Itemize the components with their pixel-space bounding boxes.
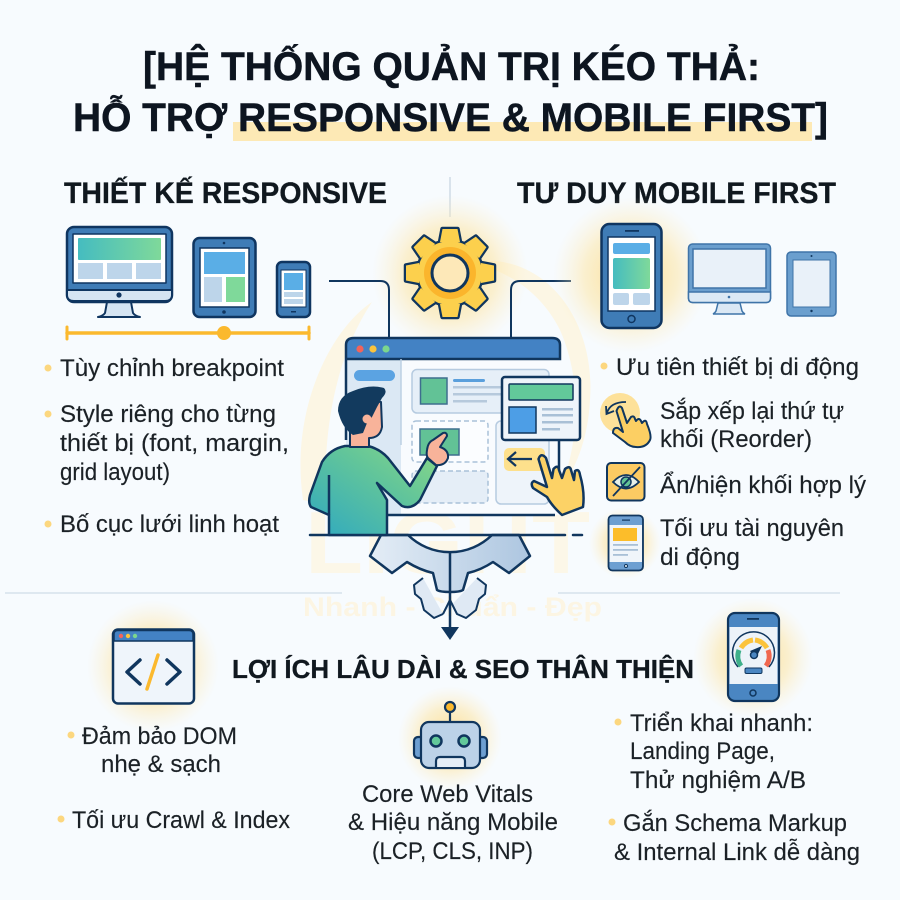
right feature list: di động — [660, 544, 740, 571]
icon: faded tablet — [787, 252, 836, 316]
left feature list: grid layout) — [60, 459, 170, 486]
icon: robot — [414, 702, 487, 768]
benefits right: Triển khai nhanh: — [630, 710, 813, 737]
browser window — [346, 338, 580, 515]
benefits left: Tối ưu Crawl & Index — [72, 807, 290, 834]
benefits center: (LCP, CLS, INP) — [372, 838, 533, 865]
right column card — [496, 421, 549, 504]
benefits left: Đảm bảo DOM — [82, 723, 237, 750]
glow: gauge phone — [693, 598, 813, 718]
stage ground line — [310, 534, 582, 536]
left feature list: Bố cục lưới linh hoạt — [60, 511, 279, 538]
benefits center: & Hiệu năng Mobile — [348, 809, 558, 836]
benefits left — [58, 723, 290, 834]
heading: long term benefits: LỢI ÍCH LÂU DÀI & SEO THÂN THIỆN — [232, 654, 694, 684]
glow: robot — [398, 686, 502, 790]
left feature list — [44, 355, 289, 538]
right feature list — [589, 354, 866, 579]
title — [73, 43, 828, 141]
left feature list: Tùy chỉnh breakpoint — [60, 355, 284, 382]
icon: code window — [113, 630, 194, 704]
floating layout card — [502, 377, 580, 440]
left feature list: thiết bị (font, margin, — [60, 430, 289, 457]
heading: responsive: THIẾT KẾ RESPONSIVE — [64, 176, 387, 210]
icon: responsive tablet — [194, 238, 256, 317]
arrow down — [441, 552, 459, 640]
watermark logo: Nhanh - Chuẩn - Đẹp — [303, 592, 602, 622]
left feature list: Style riêng cho từng — [60, 401, 276, 428]
right feature list: Tối ưu tài nguyên — [660, 515, 844, 542]
title: [HỆ THỐNG QUẢN TRỊ KÉO THẢ: — [143, 43, 760, 89]
watermark logo: LIGHT — [305, 493, 590, 592]
benefits center: Core Web Vitals — [362, 781, 533, 808]
icon: responsive phone — [277, 262, 310, 317]
right feature list: Ẩn/hiện khối hợp lý — [660, 471, 866, 499]
arrow tag — [504, 448, 545, 471]
icon: large hand dragging — [532, 455, 584, 515]
icon: hide eye — [607, 463, 644, 500]
benefits right: Gắn Schema Markup — [623, 810, 847, 837]
glow: mobile phone — [553, 197, 709, 353]
person at dashboard — [309, 387, 448, 535]
glow: small phone — [589, 507, 661, 579]
watermark logo — [301, 261, 602, 622]
right feature list: Sắp xếp lại thứ tự — [660, 398, 844, 425]
icon: mobile first phone — [602, 224, 662, 328]
benefits left: nhẹ & sạch — [101, 751, 221, 778]
breakpoint slider — [67, 326, 309, 340]
benefits right: Landing Page, — [630, 738, 775, 765]
content card — [412, 370, 549, 413]
icon: responsive desktop monitor — [67, 227, 172, 317]
gear below stage — [370, 535, 530, 618]
benefits right: & Internal Link dễ dàng — [614, 839, 860, 866]
title: HỖ TRỢ RESPONSIVE & MOBILE FIRST] — [73, 94, 828, 140]
icon: optimized phone — [608, 516, 643, 570]
benefits center — [348, 781, 558, 865]
ear — [362, 414, 372, 424]
connector lines — [329, 281, 571, 338]
benefits right: Thử nghiệm A/B — [630, 767, 806, 794]
right feature list: Ưu tiên thiết bị di động — [616, 354, 859, 381]
neck and face — [350, 400, 382, 447]
arm line — [328, 475, 330, 515]
icon: reorder hand — [600, 393, 651, 447]
pointing hand — [427, 433, 448, 465]
hair — [338, 387, 386, 435]
icon: speed gauge phone — [728, 613, 779, 701]
empty dashed drop zone — [412, 471, 488, 503]
benefits right — [608, 710, 860, 866]
glow: central gear — [372, 195, 528, 351]
heading: mobile first: TƯ DUY MOBILE FIRST — [517, 177, 836, 210]
icon: central gear — [406, 229, 494, 317]
body — [309, 446, 437, 535]
icon: faded monitor — [688, 244, 770, 314]
right feature list: khối (Reorder) — [660, 426, 812, 453]
glow: code icon — [87, 600, 219, 732]
dashed drop zone with dragged block — [412, 421, 488, 462]
